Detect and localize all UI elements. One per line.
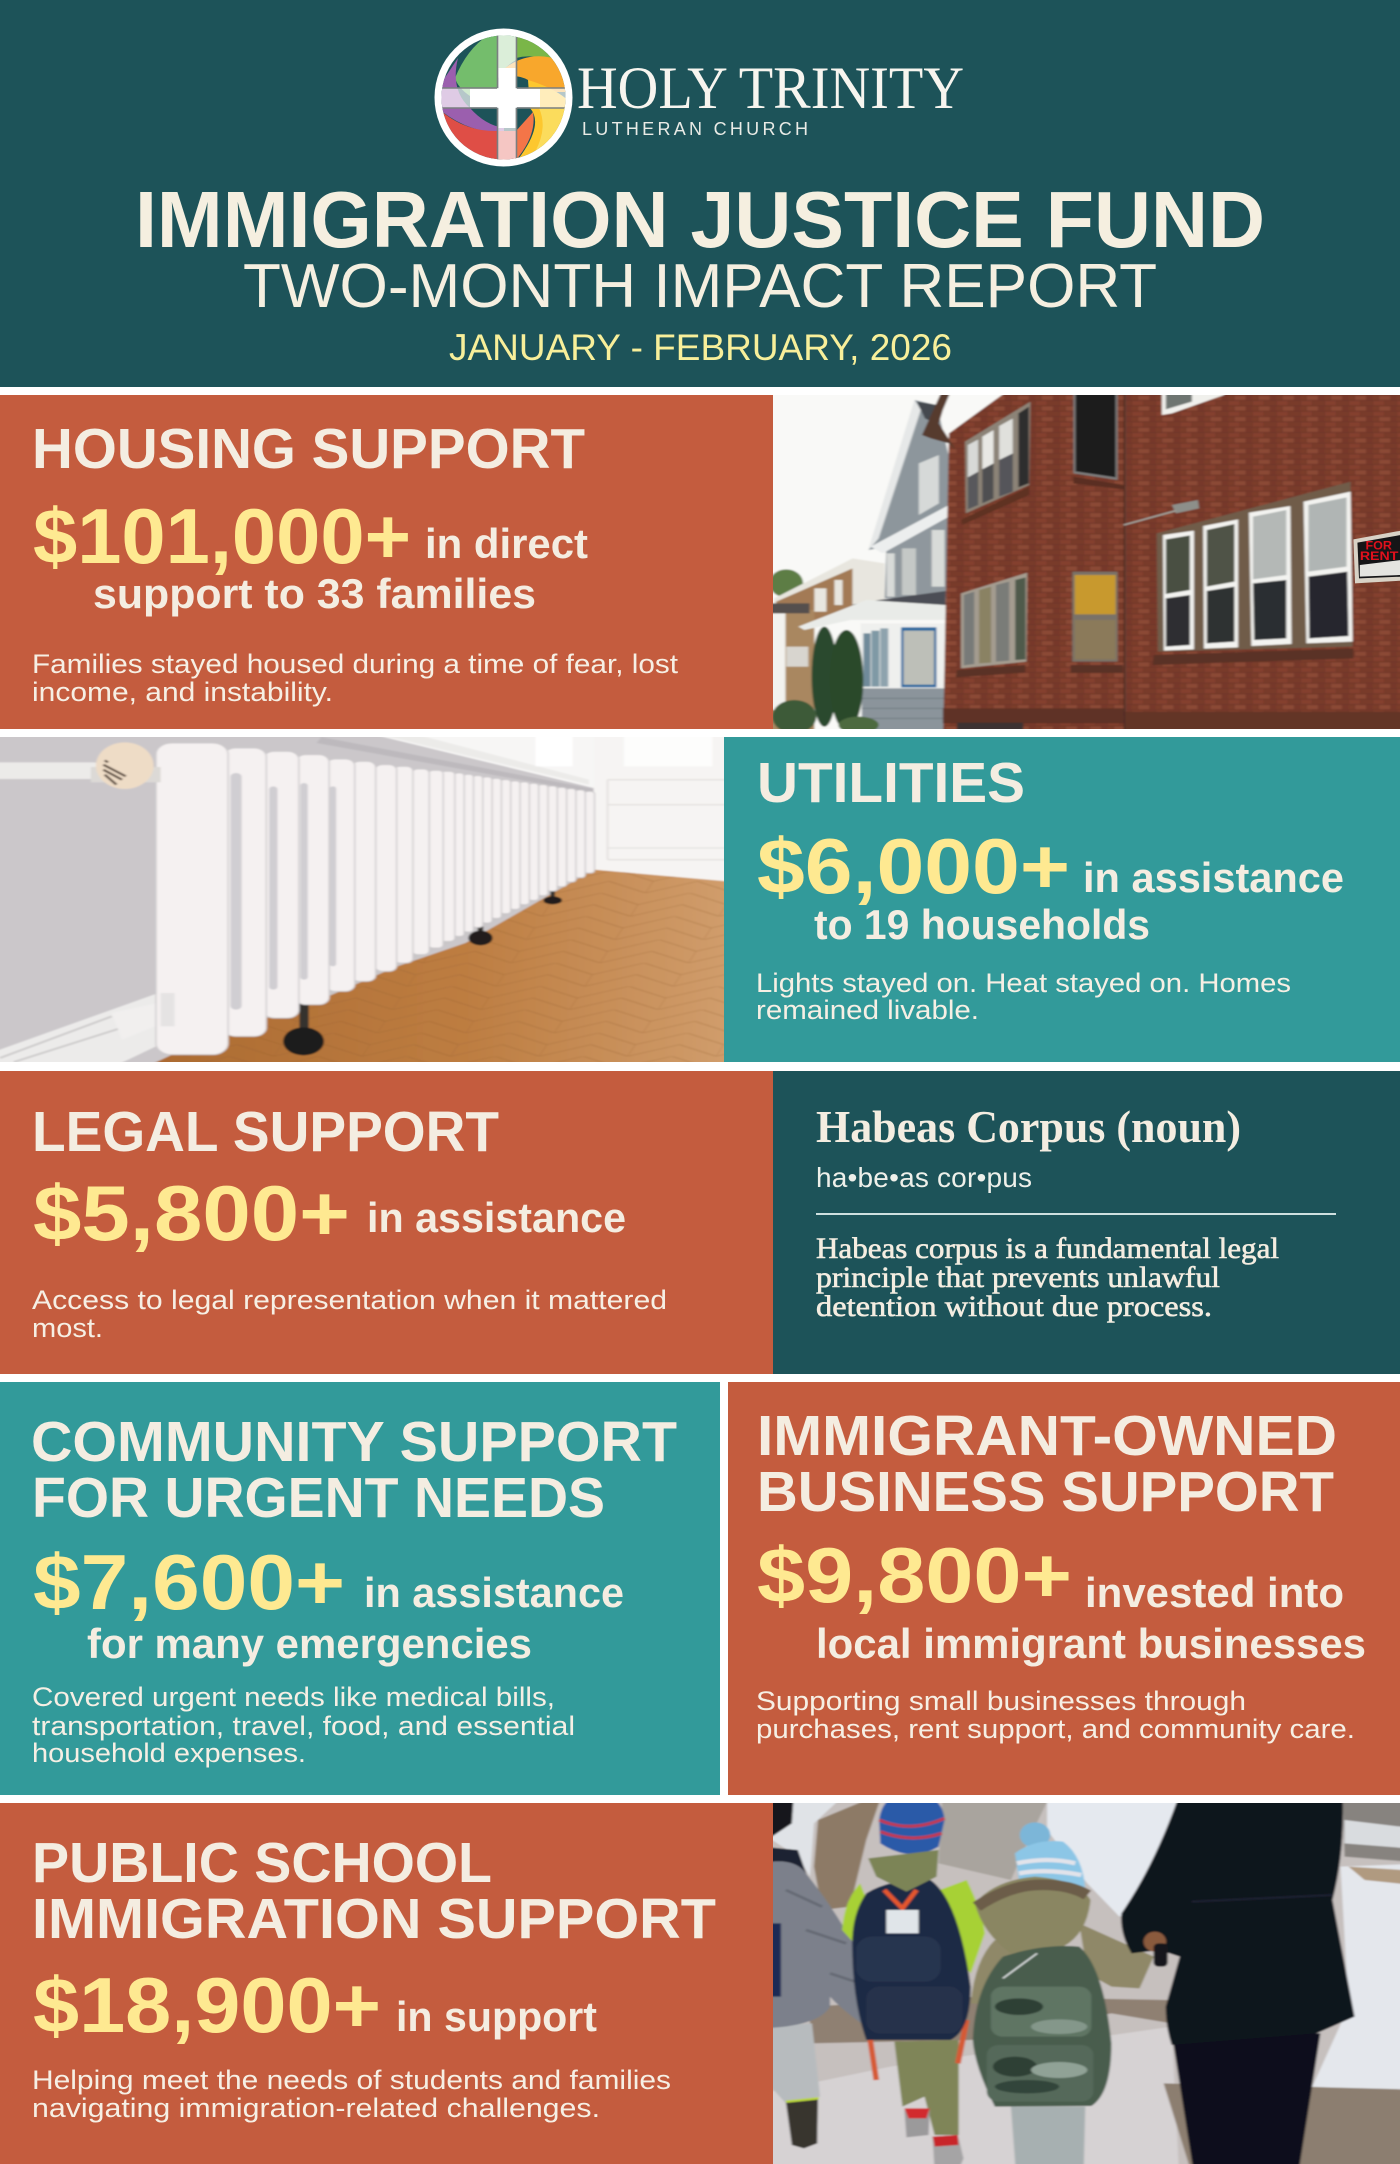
amount caption: utilities: to 19 households	[814, 901, 1150, 948]
body text: community: Covered urgent needs like medical bills,	[32, 1682, 555, 1712]
definition text	[816, 1232, 1279, 1323]
panel: habeas corpus definition	[773, 1071, 1400, 1374]
heading: community: FOR URGENT NEEDS	[32, 1466, 605, 1530]
body text: community: transportation, travel, food, and essential	[32, 1711, 575, 1741]
heading: housing: HOUSING SUPPORT	[32, 417, 585, 481]
amount caption: community: for many emergencies	[87, 1620, 532, 1667]
child: middle, lime jacket and navy backpack	[842, 1793, 985, 2164]
date range: JANUARY - FEBRUARY, 2026	[449, 327, 952, 368]
body text: utilities: Lights stayed on. Heat stayed on. Homes	[756, 968, 1291, 998]
body text: housing: Families stayed housed during a time of fear, lost	[32, 649, 679, 679]
definition term: Habeas Corpus (noun)	[816, 1101, 1241, 1152]
adult: dark coat	[1121, 1793, 1355, 2164]
amount: community: $7,600+	[33, 1538, 345, 1626]
panel: immigrant-owned business support	[728, 1382, 1400, 1795]
body text: business	[756, 1686, 1355, 1744]
amount caption: school: in support	[396, 1993, 597, 2040]
heading: school: PUBLIC SCHOOL	[32, 1831, 492, 1895]
amount caption: utilities	[814, 854, 1344, 948]
title: IMMIGRATION JUSTICE FUND	[135, 175, 1265, 264]
logo subtitle: LUTHERAN CHURCH	[582, 119, 808, 139]
amount: business: $9,800+	[757, 1531, 1072, 1619]
panel: header	[0, 0, 1400, 387]
body text: legal: Access to legal representation when it mattered	[32, 1285, 667, 1315]
body text: housing	[32, 649, 679, 707]
body text: utilities: remained livable.	[756, 995, 979, 1025]
for rent sign: FOR	[1365, 538, 1392, 552]
heading: community	[31, 1410, 677, 1530]
panel: community support	[0, 1382, 720, 1795]
photo: children with backpacks walking with an adult on a snowy sidewalk	[773, 1803, 1400, 2164]
body text: school: navigating immigration-related challenges.	[32, 2093, 600, 2123]
logo wordmark: HOLY TRINITY	[577, 55, 964, 121]
amount caption: business	[816, 1569, 1366, 1667]
icon: stained glass cross emblem	[434, 28, 572, 170]
body text: community: household expenses.	[32, 1738, 306, 1768]
amount caption: housing: in direct	[425, 520, 588, 567]
body text: school	[32, 2065, 671, 2123]
pronunciation: ha•be•as cor•pus	[816, 1162, 1032, 1193]
body text: housing: income, and instability.	[32, 677, 333, 707]
body text: community	[32, 1682, 575, 1768]
for rent sign	[1353, 531, 1400, 583]
heading: school	[32, 1831, 716, 1951]
definition text: detention without due process.	[816, 1290, 1212, 1323]
body text: utilities	[756, 968, 1291, 1025]
body text: legal: most.	[32, 1313, 103, 1343]
for rent sign: RENT	[1360, 549, 1398, 563]
amount caption: housing: support to 33 families	[93, 570, 536, 617]
amount: utilities: $6,000+	[757, 822, 1070, 910]
body text: school: Helping meet the needs of students and families	[32, 2065, 671, 2095]
amount caption: business: invested into	[1085, 1569, 1344, 1616]
amount: legal: $5,800+	[33, 1169, 350, 1257]
radiator fins	[156, 743, 595, 1055]
panel: public school immigration support	[0, 1803, 773, 2164]
panel: utilities	[724, 737, 1400, 1062]
child: left, grey jacket	[762, 1793, 890, 2148]
photo: brick apartment building with for rent sign	[773, 395, 1400, 729]
amount: housing: $101,000+	[33, 492, 411, 580]
definition text: principle that prevents unlawful	[816, 1261, 1220, 1294]
amount caption: housing	[93, 520, 588, 617]
heading: business	[757, 1404, 1337, 1524]
panel: housing support	[0, 395, 773, 729]
amount caption: utilities: in assistance	[1083, 854, 1344, 901]
heading: utilities: UTILITIES	[757, 751, 1025, 815]
heading: legal: LEGAL SUPPORT	[32, 1100, 499, 1164]
amount caption: community: in assistance	[364, 1569, 624, 1616]
radiator feet	[283, 890, 562, 1055]
subtitle: TWO-MONTH IMPACT REPORT	[243, 252, 1157, 321]
amount: school: $18,900+	[33, 1961, 381, 2049]
heading: business: BUSINESS SUPPORT	[757, 1460, 1334, 1524]
body text: business: purchases, rent support, and community care.	[756, 1714, 1355, 1744]
amount caption: legal: in assistance	[367, 1194, 626, 1241]
amount caption: community	[87, 1569, 624, 1667]
child: right, olive coat and camo backpack	[971, 1822, 1154, 2164]
thermostat valve	[91, 742, 161, 789]
heading: business: IMMIGRANT-OWNED	[757, 1404, 1337, 1468]
heading: school: IMMIGRATION SUPPORT	[32, 1887, 716, 1951]
body text: legal	[32, 1285, 667, 1343]
photo: white radiator on herringbone floor	[0, 737, 724, 1062]
logo: Holy Trinity Lutheran Church	[434, 28, 964, 170]
panel: legal support	[0, 1071, 773, 1374]
amount caption: business: local immigrant businesses	[816, 1620, 1366, 1667]
heading: community: COMMUNITY SUPPORT	[31, 1410, 677, 1474]
definition text: Habeas corpus is a fundamental legal	[816, 1232, 1279, 1265]
body text: business: Supporting small businesses through	[756, 1686, 1246, 1716]
